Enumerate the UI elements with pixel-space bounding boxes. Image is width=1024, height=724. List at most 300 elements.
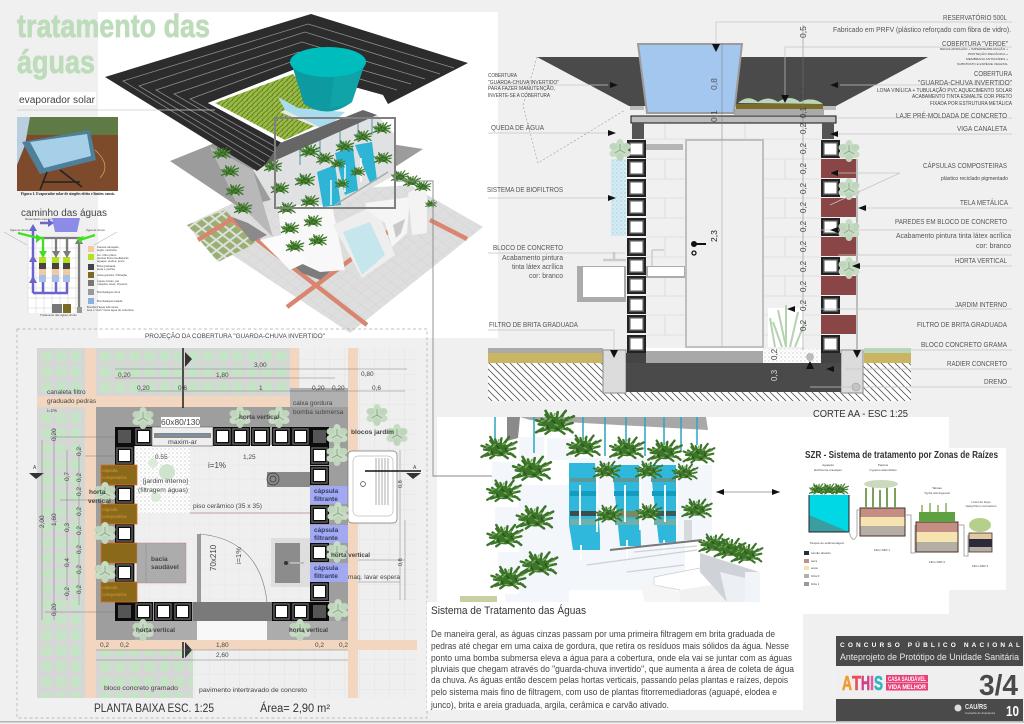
title: tratamento das	[17, 8, 210, 44]
interior garden	[768, 305, 805, 347]
plant labels: Lírios do brejo	[971, 500, 991, 504]
section labels right: HORTA VERTICAL	[955, 256, 1007, 265]
sheet number: 3/4	[979, 670, 1018, 702]
plan labels: 0,4	[64, 558, 71, 567]
evaporador divider	[17, 109, 215, 111]
plan labels: 0,20	[51, 428, 58, 441]
section dimensions: 0,2	[799, 280, 808, 292]
compost capsules: composteira	[102, 514, 127, 519]
section dimensions: 0,5	[798, 26, 808, 38]
section labels right: CÁPSULAS COMPOSTEIRAS	[923, 161, 1007, 170]
jardim interno: [jardim interno]	[143, 478, 188, 485]
plants on perspective	[213, 123, 437, 251]
blue pipes	[495, 417, 697, 456]
plan labels: 2,60	[216, 652, 229, 659]
section markers: A	[413, 465, 417, 471]
brick wall background	[645, 123, 821, 351]
SZR legend: brita 0	[811, 574, 820, 578]
CAU/RS logo: CAU/RS	[965, 704, 987, 711]
plumbing rail	[335, 172, 388, 205]
compost capsules: composteira	[102, 475, 127, 480]
roof lines	[4, 232, 117, 245]
filter 3	[969, 518, 992, 552]
roof "guarda-chuva invertido"	[105, 14, 468, 171]
left block column	[627, 140, 646, 353]
connecting pipes	[849, 510, 968, 556]
water path diagram: Água de chuva	[86, 228, 105, 232]
plan labels: 0,8	[398, 480, 404, 488]
SZR legend: terra	[811, 559, 818, 563]
pale shower surround	[333, 205, 395, 278]
water path diagram: Água de chuva	[10, 228, 29, 232]
plan labels: piso cerâmico (35 x 35)	[193, 503, 262, 510]
plan labels: 0,20	[312, 385, 325, 392]
filter 1	[860, 480, 905, 536]
plan dimension lines	[42, 369, 407, 660]
section dimensions: 0,1	[799, 106, 808, 118]
plan labels: 2,00	[39, 515, 46, 528]
compost capsules	[101, 465, 137, 602]
grey slab under roof	[170, 124, 423, 208]
ground paving	[187, 185, 483, 333]
text body: da chuva. As águas então descem pelas hortas verticais, passando pelas plantas e raízes, depois	[431, 675, 788, 685]
section labels left: cor: branco	[529, 271, 563, 280]
plan labels: 60x80/130	[161, 418, 201, 427]
plumbing rails	[587, 540, 702, 572]
concrete slab	[631, 116, 836, 123]
section dimensions: 0,3	[770, 369, 779, 381]
plant labels: Typha domingensis	[924, 491, 950, 495]
water path diagram	[4, 217, 134, 317]
text body: De maneira geral, as águas cinzas passam por uma primeira filtragem em brita graduada de	[431, 629, 775, 639]
section labels left: PARA FAZER MANUTENÇÃO,	[488, 85, 555, 92]
plan labels: graduado pedras	[47, 398, 97, 405]
section labels right: LAJE PRÉ-MOLDADA DE CONCRETO	[896, 111, 1007, 120]
plant labels: Aguapés	[822, 463, 834, 467]
plant labels: Filtro SZR 3	[972, 564, 988, 568]
section markers	[29, 348, 421, 658]
section labels left: QUEDA DE ÁGUA	[491, 123, 544, 132]
filter capsules	[310, 486, 348, 582]
detail sink	[640, 568, 730, 602]
section labels left: INVERTE-SE A COBERTURA	[488, 93, 551, 99]
perspective drawing	[105, 14, 483, 333]
plan labels: 0,7	[64, 472, 71, 481]
mesh line	[856, 159, 858, 349]
grass blocks	[37, 348, 290, 698]
plan labels: 0,8	[398, 558, 404, 566]
grey gravel strips	[232, 217, 267, 242]
plan labels: 70x210	[209, 544, 218, 571]
CAU/RS logo: Conselho de Arquitetura	[965, 711, 995, 715]
section arrowheads	[608, 44, 866, 372]
panel: SZR	[803, 448, 1006, 590]
plan labels: 0,2	[76, 585, 83, 594]
plan plants	[94, 404, 408, 641]
diagram legend: plantas fitorremediadoras	[97, 256, 129, 260]
translucent shower box	[343, 222, 385, 275]
dark column head	[507, 417, 520, 441]
plan labels: 0,2	[315, 642, 324, 649]
door and swing	[197, 534, 267, 602]
filter 2	[916, 503, 958, 552]
blue capsules	[569, 463, 676, 550]
plan labels: pavimento intertravado de concreto	[199, 687, 307, 694]
sink table	[365, 197, 410, 247]
water path diagram: Tratamento das águas cinzas	[40, 313, 77, 317]
text body: pluviais que chegam através do "guarda-chuva invertido", que aumenta a área de coleta de água	[431, 664, 795, 674]
competition title: CONCURSO PÚBLICO NACIONAL	[840, 640, 1020, 649]
section dimensions: 0,2	[799, 122, 808, 134]
double arrow	[716, 489, 780, 495]
bacia saudável: saudável	[151, 564, 179, 571]
plan labels: i=1%	[208, 461, 226, 470]
left sink	[577, 252, 626, 302]
section labels right: FILTRO DE BRITA GRADUADA	[917, 320, 1007, 329]
plant labels: Taboas	[932, 486, 942, 490]
jardim interno	[135, 447, 190, 513]
grey platform	[96, 407, 348, 640]
casa saudável badge: CASA SAUDÁVEL	[888, 674, 926, 683]
grass blocks on ground	[187, 210, 256, 262]
grass blocks edge	[460, 596, 497, 602]
section dimensions: 0,2	[799, 240, 808, 252]
ATHIS logo: I	[870, 673, 874, 695]
plan labels: 0,2	[64, 587, 71, 596]
section dimensions: 0,8	[709, 78, 719, 90]
floor strip	[646, 348, 763, 351]
section markers: A	[33, 465, 37, 471]
photo: solar evaporator	[17, 117, 118, 191]
SZR legend: areia	[811, 566, 818, 570]
washing tank	[348, 451, 397, 523]
section labels right: REGULARIZAÇÃO + IMPERMEABILIZAÇÃO +	[940, 46, 1008, 51]
drain line	[190, 512, 310, 514]
diagram legend: Águas cinzas, pia	[97, 279, 119, 283]
roof projection label: PROJEÇÃO DA COBERTURA "GUARDA-CHUVA INVERTIDO"	[145, 331, 326, 340]
capsule layers	[570, 478, 676, 525]
compost capsules: cápsula	[102, 585, 118, 590]
bottom pipeline	[52, 304, 62, 313]
section labels right: ACABAMENTO TINTA ESMALTE COR PRETO	[912, 94, 1012, 100]
section labels right: RESERVATÓRIO 500L	[943, 13, 1007, 22]
text heading: Sistema de Tratamento das Águas	[431, 604, 586, 617]
plan labels: 1,60	[51, 513, 58, 526]
section labels right: COBERTURA	[974, 69, 1012, 78]
white front columns	[278, 205, 345, 272]
right planter	[700, 553, 760, 602]
plan labels: horta vertical	[331, 552, 370, 559]
SZR legend: carvão ativado	[811, 551, 831, 555]
ATHIS logo: H	[861, 673, 870, 695]
plan labels: 0,6	[178, 385, 187, 392]
section labels right: TELA METÁLICA	[960, 198, 1008, 207]
diagram legend: Caixote almejado,	[97, 245, 120, 249]
section labels left	[487, 73, 578, 329]
interior floor	[135, 445, 310, 602]
section dimensions: 0,2	[799, 86, 808, 98]
detail plants	[482, 411, 762, 588]
plant labels: Tanque de sedimentagem	[810, 541, 845, 545]
section labels right: LONA VINÍLICA + TUBULAÇÃO PVC AQUECIMENTO SOLAR	[877, 87, 1012, 94]
title: águas	[17, 44, 95, 80]
diagram legend: Brita graduada	[97, 264, 116, 268]
window maxim-ar: maxim-ar	[168, 439, 198, 446]
left column blocks	[115, 446, 134, 582]
radier concrete	[626, 363, 841, 392]
diagram legend: aguapé, elodea, junco	[97, 259, 125, 263]
panel: competition stamp	[836, 636, 1023, 721]
diagram legend: areia e pedras	[97, 267, 115, 271]
section labels right: COBERTURA "VERDE"	[942, 39, 1008, 48]
plan labels: 0,2	[76, 507, 83, 516]
small tanks on roof	[278, 97, 345, 130]
section dimensions: 0,2	[799, 299, 808, 311]
plan labels: 0,2	[100, 642, 109, 649]
dimension lines	[722, 25, 803, 350]
text body: pedras até chegar em uma caixa de gordura, que retira os resíduos mais sólidos da água. Nesse	[431, 641, 789, 651]
white base	[260, 234, 307, 270]
plant labels	[810, 463, 997, 568]
section labels right: plástico reciclado pigmentado	[941, 176, 1008, 182]
compost capsules: composteira	[102, 592, 127, 597]
plan labels: 0,6	[372, 385, 381, 392]
diagram legend: Bomba d'água submersa,	[87, 305, 119, 309]
plan labels: 0,80	[361, 371, 374, 378]
plant labels: Papirus	[878, 463, 889, 467]
plan labels: horta vertical	[289, 627, 328, 634]
plant labels: Hedychium coronarium	[966, 504, 997, 508]
diagram legend: Bomba/água cinza	[97, 290, 121, 294]
section dimensions: 0,2	[799, 319, 808, 331]
plan labels: 0,2	[76, 487, 83, 496]
floor plan	[29, 348, 421, 698]
drainage channels	[603, 350, 863, 393]
gutters	[630, 106, 644, 110]
text body: ponto uma bomba submersa eleva a água para a cobertura, onde ela vai se juntar com as águas	[431, 653, 792, 663]
right white column	[408, 182, 427, 235]
plan labels	[39, 362, 404, 694]
section labels right	[833, 13, 1013, 386]
diagram legend: Bomba/água tratada	[97, 299, 123, 303]
section labels right: SUBSTRATO E ESPÉCIE VEGETAL	[957, 61, 1008, 66]
right sink	[646, 250, 685, 278]
diagram legend: leva o "ciclo" limite água de cobertura	[87, 308, 134, 312]
section dimensions: 0,1	[709, 110, 719, 122]
plan labels: caixa gordura	[293, 400, 333, 407]
section labels right: VIGA CANALETA	[957, 124, 1007, 133]
compost capsules: cápsula	[102, 468, 118, 473]
filter layers	[39, 257, 70, 282]
biofilter	[611, 159, 626, 236]
filter capsules: cápsula	[314, 488, 339, 495]
plan labels: 0,20	[137, 385, 150, 392]
section dimensions: 0,2	[799, 201, 808, 213]
connector line from perspective to detail	[395, 181, 502, 478]
bottom frame line	[0, 721, 1024, 722]
plan labels: i=1%	[234, 547, 243, 564]
plan labels: horta	[89, 489, 106, 496]
section dimensions: 0,2	[799, 182, 808, 194]
inverted roof dashed sweep	[523, 57, 625, 163]
white backing panel: perspective	[98, 12, 498, 338]
section dimensions: 0,2	[799, 142, 808, 154]
white entrance	[197, 621, 267, 640]
CAU/RS logo	[954, 704, 995, 715]
plan labels: 0,20	[332, 385, 345, 392]
section labels left: Acabamento pintura	[502, 253, 564, 262]
section labels left: BLOCO DE CONCRETO	[493, 243, 563, 252]
light back wall	[253, 115, 395, 207]
plan labels: vertical	[88, 498, 111, 505]
section labels right: DRENO	[984, 377, 1007, 386]
orange strips	[37, 348, 417, 698]
capsules	[317, 142, 377, 207]
grease box	[290, 388, 348, 407]
top row blocks	[115, 427, 329, 446]
planter grey shade	[684, 520, 692, 540]
section labels left: SISTEMA DE BIOFILTROS	[487, 185, 563, 194]
plan title: PLANTA BAIXA ESC. 1:25	[94, 703, 214, 715]
section dimensions: 0,2	[799, 260, 808, 272]
ATHIS logo: A	[842, 673, 852, 695]
section labels left: "GUARDA-CHUVA INVERTIDO"	[488, 80, 559, 86]
gravel filter	[763, 349, 821, 363]
shelf	[646, 144, 683, 150]
bottom row blocks	[115, 602, 329, 621]
detail marker box	[275, 118, 395, 208]
section leader lines	[488, 22, 1012, 387]
top beam	[472, 417, 708, 430]
section dimensions: 0,2	[770, 348, 779, 360]
section labels right: RADIER CONCRETO	[947, 359, 1007, 368]
ATHIS logo	[842, 673, 883, 695]
reservoir cylinder	[290, 47, 366, 112]
filter capsules: cápsula	[314, 527, 339, 534]
title	[17, 8, 210, 80]
plan labels: 1,25	[243, 454, 256, 461]
section labels left: tinta látex acrílica	[512, 262, 564, 271]
reservoir section	[638, 44, 742, 113]
panel: water treatment text	[427, 602, 803, 710]
bacia saudável	[137, 543, 186, 583]
filter capsules: filtrante	[314, 573, 338, 580]
caminho das águas heading: caminho das águas	[21, 208, 107, 219]
detail view: vertical garden	[460, 411, 762, 602]
section drawing	[488, 22, 1012, 401]
section labels right: BLOCO CONCRETO GRAMA	[921, 340, 1007, 349]
casa saudável badge: VIDA MELHOR	[888, 684, 926, 691]
white tubes	[580, 465, 677, 560]
grey side wall	[210, 147, 273, 237]
plan labels: 0,20	[118, 372, 131, 379]
casa saudável badge	[886, 674, 928, 691]
plan labels: 0,2	[120, 642, 129, 649]
shower pipe	[267, 472, 310, 487]
plan labels: 3,00	[254, 362, 267, 369]
section labels right: cor: branco	[976, 241, 1011, 250]
ground layers	[488, 348, 911, 401]
plan labels: 1,80	[216, 372, 229, 379]
plan labels: 0,2	[76, 565, 83, 574]
plan labels: 0,20	[51, 603, 58, 616]
roof section	[537, 57, 928, 106]
window maxim-ar	[152, 427, 213, 446]
diagram legend: Ion. Filtro plano	[97, 253, 117, 257]
section title: CORTE AA - ESC 1:25	[813, 409, 908, 420]
plan labels: horta vertical	[239, 414, 279, 421]
plan labels: i=1%	[47, 408, 57, 413]
bacia saudável: bacia	[151, 556, 168, 563]
site paving	[37, 348, 417, 698]
plan labels: 0,3	[64, 523, 71, 532]
roof front grey band	[265, 110, 377, 165]
roof projection dashed frame	[17, 329, 427, 718]
plan labels: 0,2	[76, 526, 83, 535]
section labels right: JARDIM INTERNO	[955, 300, 1007, 309]
text body: junco), brita e areia graduada, argila, cerâmica e carvão ativado.	[430, 700, 669, 710]
reservoir	[52, 218, 80, 232]
plan labels: 0.55	[155, 454, 168, 461]
diagram legend: máquina, lavar, chuveiro	[97, 282, 128, 286]
plant labels: Cyperus alternifolius	[869, 468, 897, 472]
section labels right: Fabricado em PRFV (plástico reforçado com fibra de vidro).	[833, 25, 1011, 34]
IAB logo: 10	[1006, 703, 1019, 720]
right block column	[821, 140, 840, 353]
plan area: Área= 2,90 m²	[260, 702, 330, 715]
plant labels: Eichhornia crassipes	[814, 468, 842, 472]
text body	[430, 629, 795, 710]
section plants	[610, 139, 860, 279]
purple flow	[33, 223, 68, 293]
blue pipes	[300, 115, 372, 165]
ATHIS logo: T	[852, 673, 861, 695]
diagram legend: argila, cerâmica	[97, 248, 117, 252]
plan labels: 0,2	[339, 642, 348, 649]
plan labels: bomba submersa	[293, 409, 344, 416]
plan labels: horta vertical	[136, 627, 175, 634]
diagram grid	[28, 238, 80, 313]
section labels left: FILTRO DE BRITA GRADUADA	[489, 320, 578, 329]
filter capsules: filtrante	[314, 535, 338, 542]
plan labels: maq. lavar espera	[348, 574, 400, 581]
filter capsules: cápsula	[314, 565, 339, 572]
section dimensions	[709, 26, 808, 381]
pale planter walls	[492, 437, 712, 602]
photo caption: Figura 1. Evaporador solar de simples efeito e limites causis.	[21, 192, 115, 196]
plant labels: Filtro SZR 2	[929, 560, 945, 564]
jardim interno: (filtragem águas)	[138, 487, 188, 494]
orange ground stripes	[198, 217, 467, 325]
compost capsules	[821, 159, 856, 334]
section labels right: FIXADA POR ESTRUTURA METÁLICA	[930, 100, 1013, 107]
section dimensions: 0,2	[799, 162, 808, 174]
diagram legend	[87, 245, 134, 312]
door threshold	[193, 602, 273, 621]
evaporador solar heading: evaporador solar	[19, 95, 96, 106]
text body: pelo sistema mais fino de filtragem, com uso de plantas fitorremediadoras (aguapé, elodea e	[431, 687, 777, 697]
white backing panel: detail	[437, 417, 949, 614]
section labels right: PAREDES EM BLOCO DE CONCRETO	[895, 217, 1007, 226]
plan labels: 1	[259, 385, 263, 392]
section labels right: MEMBRANA ANTIRAÍZES +	[966, 57, 1008, 61]
section labels right: "GUARDA-CHUVA INVERTIDO"	[918, 78, 1012, 87]
door	[686, 140, 763, 347]
diagram captions: Reservatório superior	[25, 217, 52, 221]
green flow	[18, 233, 95, 252]
plan labels: canaleta filtro	[47, 389, 86, 396]
right column blocks	[310, 446, 329, 601]
